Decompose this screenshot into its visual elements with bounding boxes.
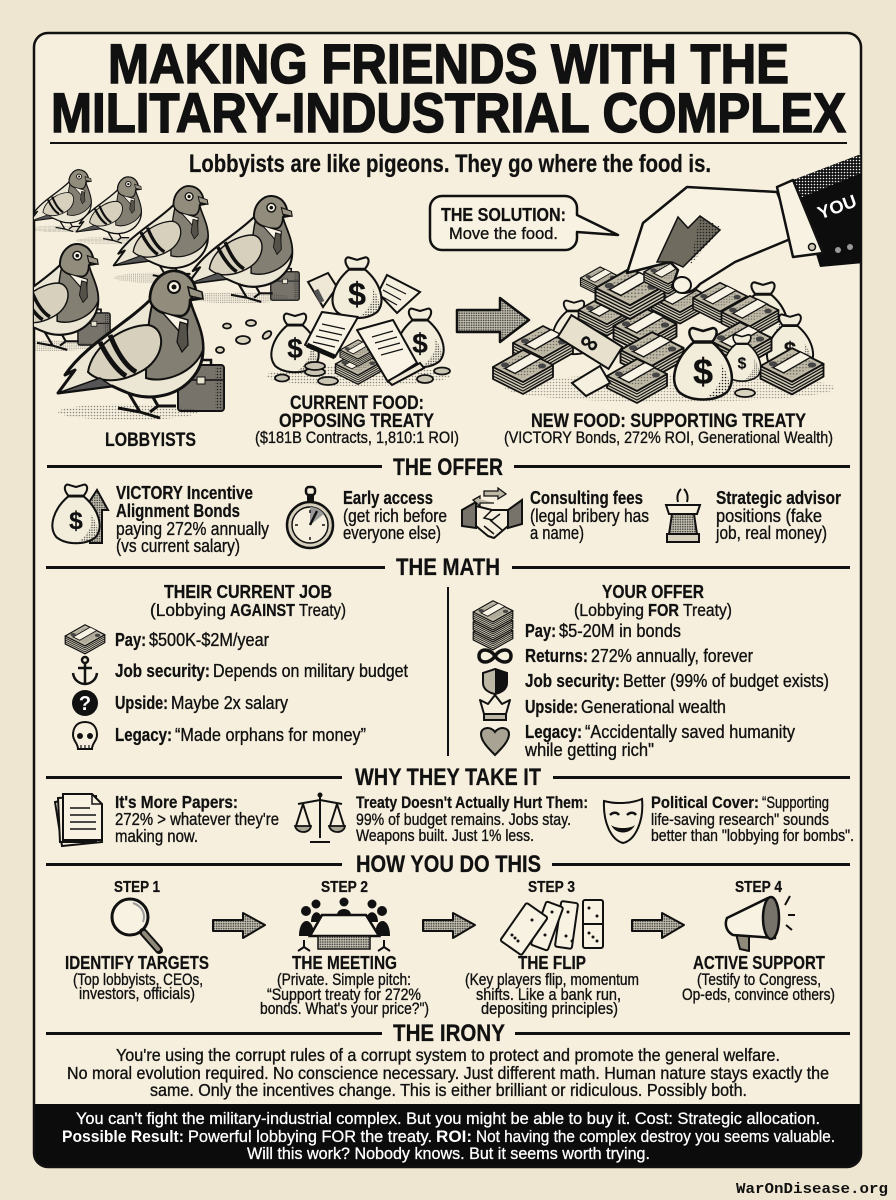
icon: question mark bbox=[72, 690, 98, 716]
footer banner text: Powerful lobbying FOR the treaty. bbox=[188, 1127, 432, 1146]
text: VICTORY bonds: Alignment Bonds bbox=[116, 501, 240, 521]
panel: the offer bbox=[52, 483, 841, 556]
column heading: AGAINST bbox=[230, 600, 295, 620]
icon: money bag with arrow: $ bbox=[69, 508, 83, 535]
panel: steps bbox=[65, 879, 835, 1018]
contract scroll: left bbox=[305, 312, 358, 357]
bag: upper left: $ bbox=[568, 321, 581, 346]
subtitle: Lobbyists are like pigeons. They go where the food is. bbox=[189, 150, 711, 178]
sleeve bbox=[793, 153, 864, 267]
bag: top: $ bbox=[348, 276, 366, 312]
text: strategic advisor: Strategic advisor bbox=[716, 488, 841, 508]
icon: cash bbox=[65, 625, 105, 654]
callout: the solution: Move the food. bbox=[449, 224, 558, 243]
text: early access: everyone else) bbox=[343, 523, 441, 543]
upside: Generational wealth bbox=[581, 697, 726, 717]
pigeon: back left bbox=[30, 170, 91, 232]
text: VICTORY bonds: VICTORY Incentive bbox=[116, 483, 253, 503]
text: political cover bbox=[651, 794, 854, 845]
step 3: shifts. Like a bank run, bbox=[476, 986, 621, 1004]
step 1: investors, officials) bbox=[79, 985, 195, 1003]
text: treaty doesn't hurt: Weapons built. Just 1% less. bbox=[356, 827, 534, 845]
step 4: STEP 4 bbox=[735, 879, 782, 896]
title rule bbox=[50, 142, 847, 144]
arrow: step 1 to 2 bbox=[213, 913, 265, 938]
heading: the offer: THE OFFER bbox=[393, 454, 503, 481]
text: more papers: It's More Papers: bbox=[115, 792, 238, 812]
job security: Depends on military budget bbox=[213, 661, 408, 681]
text: early access: (get rich before bbox=[343, 506, 447, 526]
illustration: new food pile bbox=[493, 258, 835, 403]
text: strategic advisor: positions (fake bbox=[716, 506, 822, 526]
text: the irony: No moral evolution required. No conscience necessary. Just different math. Human nature stays exactly the bbox=[67, 1063, 829, 1083]
pigeon: left bbox=[34, 243, 100, 351]
coins bbox=[275, 362, 450, 385]
step 2 bbox=[260, 879, 429, 1018]
legacy bbox=[524, 722, 795, 760]
pigeon: right bbox=[188, 196, 292, 303]
cuff bbox=[777, 180, 823, 257]
briefcase: front pigeon bbox=[178, 360, 224, 411]
heading: the irony: THE IRONY bbox=[393, 1020, 505, 1047]
title: MAKING FRIENDS WITH THE bbox=[108, 32, 789, 95]
bag: upper right: $ bbox=[756, 307, 770, 334]
text: the irony bbox=[67, 1045, 829, 1100]
step 3: depositing principles) bbox=[481, 1000, 618, 1018]
pay: $5-20M in bonds bbox=[559, 621, 681, 641]
label: new food: NEW FOOD: SUPPORTING TREATY bbox=[531, 410, 806, 432]
legacy: Legacy: bbox=[525, 722, 582, 742]
text: treaty doesn't hurt: 99% of budget remains. Jobs stay. bbox=[356, 811, 571, 829]
bag: upper left bbox=[552, 300, 596, 354]
icon: podium bbox=[666, 489, 700, 542]
briefcase: left pigeon bbox=[78, 309, 110, 345]
icon: megaphone bbox=[726, 896, 795, 951]
footer banner text bbox=[62, 1109, 835, 1163]
job security: Job security: bbox=[525, 671, 620, 691]
heading: why they take it: WHY THEY TAKE IT bbox=[355, 764, 541, 791]
label: new food bbox=[504, 410, 833, 447]
icon: infinity bbox=[479, 650, 511, 662]
text: VICTORY bonds: (vs current salary) bbox=[116, 536, 240, 556]
returns: Returns: bbox=[525, 646, 588, 666]
step 4 bbox=[682, 879, 835, 1004]
icon: crumbs bbox=[216, 320, 273, 353]
heading: the offer bbox=[47, 454, 850, 481]
footer credit: WarOnDisease.org bbox=[736, 1181, 888, 1198]
heading: how you do this bbox=[46, 851, 850, 878]
panel: your offer bbox=[473, 582, 829, 760]
step 3: (Key players flip, momentum bbox=[465, 971, 639, 989]
text: more papers: 272% > whatever they're bbox=[115, 809, 279, 829]
step 2: “Support treaty for 272% bbox=[267, 986, 421, 1004]
briefcase: right pigeon bbox=[271, 269, 299, 300]
job security bbox=[525, 671, 829, 691]
step 1 bbox=[65, 879, 209, 1003]
upside: Maybe 2x salary bbox=[171, 693, 288, 713]
icon: dominoes bbox=[500, 900, 603, 955]
step 1: STEP 1 bbox=[114, 879, 160, 896]
column heading bbox=[150, 582, 346, 620]
bill with infinity: ∞ bbox=[574, 324, 606, 360]
column heading bbox=[574, 582, 732, 620]
icon: skull bbox=[73, 722, 97, 749]
text: consulting fees: (legal bribery has bbox=[530, 506, 649, 526]
text: strategic advisor: job, real money) bbox=[715, 523, 827, 543]
job security: Job security: bbox=[115, 661, 210, 681]
text: consulting fees: a name) bbox=[530, 523, 584, 543]
illustration: current food pile bbox=[266, 257, 450, 386]
label: new food: (VICTORY Bonds, 272% ROI, Generational Wealth) bbox=[504, 428, 833, 447]
pigeon: back middle bbox=[76, 177, 141, 244]
bag: right bbox=[767, 314, 813, 372]
bag: right: $ bbox=[412, 328, 428, 359]
text: political cover: Political Cover: bbox=[651, 794, 759, 812]
pay: $500K-$2M/year bbox=[149, 630, 269, 650]
icon: cash stack bbox=[473, 601, 513, 650]
heading: the math bbox=[46, 554, 850, 581]
bag: small bbox=[723, 335, 761, 382]
heading: the math: THE MATH bbox=[396, 554, 500, 581]
callout: the solution: THE SOLUTION: bbox=[441, 205, 566, 225]
legacy: Legacy: bbox=[115, 725, 172, 745]
panel: why they take it bbox=[55, 792, 854, 846]
legacy: “Accidentally saved humanity bbox=[585, 722, 795, 742]
sleeve label: YOU bbox=[815, 191, 859, 223]
arrow: step 3 to 4 bbox=[632, 913, 684, 938]
icon: crown bbox=[480, 695, 510, 720]
icon: scales bbox=[295, 792, 345, 842]
column heading: (Lobbying bbox=[574, 600, 644, 620]
bill with infinity bbox=[557, 313, 623, 371]
column heading: Treaty) bbox=[683, 600, 732, 620]
returns bbox=[525, 646, 753, 666]
icon: shield bbox=[483, 669, 507, 694]
step 2: (Private. Simple pitch: bbox=[277, 971, 411, 989]
hand bbox=[627, 187, 793, 293]
column heading: THEIR CURRENT JOB bbox=[164, 582, 332, 602]
pay: Pay: bbox=[525, 621, 556, 641]
pigeon: upper middle bbox=[114, 186, 208, 283]
text: strategic advisor bbox=[715, 488, 841, 543]
bag: big front bbox=[674, 328, 732, 400]
icon: handshake bbox=[462, 488, 522, 538]
label: current food: CURRENT FOOD: bbox=[290, 392, 424, 414]
text: treaty doesn't hurt: Treaty Doesn't Actually Hurt Them: bbox=[356, 794, 588, 812]
footer banner text: ROI: bbox=[436, 1127, 472, 1146]
icon: heart bbox=[481, 728, 509, 755]
column heading: FOR bbox=[648, 600, 679, 620]
step 4: Op-eds, convince others) bbox=[682, 986, 835, 1004]
bag: small: $ bbox=[738, 356, 747, 373]
step 3: THE FLIP bbox=[518, 952, 586, 973]
step 3 bbox=[465, 879, 639, 1018]
heading: how you do this: HOW YOU DO THIS bbox=[356, 851, 541, 878]
arrow: step 2 to 3 bbox=[423, 913, 475, 938]
text: political cover: life-saving research" sounds bbox=[651, 811, 829, 829]
bag: left bbox=[271, 314, 319, 373]
label: current food bbox=[255, 392, 459, 447]
footer banner text: Not having the complex destroy you seems valuable. bbox=[476, 1127, 835, 1146]
column heading: (Lobbying bbox=[150, 600, 226, 620]
text: political cover: “Supporting bbox=[762, 794, 829, 812]
step 4: (Testify to Congress, bbox=[697, 971, 821, 989]
legacy: “Made orphans for money” bbox=[175, 725, 366, 745]
text: treaty doesn't hurt bbox=[356, 794, 588, 845]
icon: money bag with arrow bbox=[52, 485, 108, 544]
upside bbox=[115, 693, 288, 713]
text: VICTORY bonds: paying 272% annually bbox=[116, 519, 269, 539]
job security bbox=[115, 661, 408, 681]
icon: anchor bbox=[73, 657, 97, 684]
label: current food: ($181B Contracts, 1,810:1 ROI) bbox=[255, 428, 459, 447]
callout: the solution bbox=[430, 196, 618, 250]
column heading: Treaty) bbox=[299, 600, 346, 620]
heading: the irony bbox=[46, 1020, 850, 1047]
icon: papers bbox=[55, 794, 102, 846]
label: lobbyists: LOBBYISTS bbox=[105, 429, 196, 451]
text: political cover: better than "lobbying for bombs". bbox=[651, 827, 854, 845]
text: consulting fees: Consulting fees bbox=[530, 488, 643, 508]
bag: right: $ bbox=[784, 338, 797, 363]
step 4: ACTIVE SUPPORT bbox=[693, 952, 826, 973]
footer banner text: You can't fight the military-industrial complex. But you might be able to buy it. Cost: Strategic allocation. bbox=[76, 1109, 820, 1128]
panel: their current job bbox=[65, 582, 408, 749]
icon: question mark: ? bbox=[79, 693, 91, 715]
bag: top bbox=[333, 257, 381, 318]
footer banner text: Will this work? Nobody knows. But it seems worth trying. bbox=[247, 1144, 650, 1163]
text: early access bbox=[343, 488, 447, 543]
bag: left: $ bbox=[287, 333, 303, 364]
bag: upper right bbox=[739, 282, 787, 344]
icon: stopwatch bbox=[287, 487, 333, 548]
arrow: move food bbox=[457, 298, 529, 342]
column heading: YOUR OFFER bbox=[602, 582, 704, 602]
bag: right bbox=[396, 309, 444, 368]
returns: 272% annually, forever bbox=[591, 646, 753, 666]
upside bbox=[525, 697, 726, 717]
job security: Better (99% of budget exists) bbox=[623, 671, 829, 691]
contract scroll: right bbox=[357, 320, 424, 385]
step 1: (Top lobbyists, CEOs, bbox=[73, 971, 203, 989]
icon: meeting table bbox=[298, 898, 390, 951]
upside: Upside: bbox=[525, 697, 578, 717]
illustration: flock of lobbyist pigeons bbox=[34, 169, 300, 420]
text: the irony: You're using the corrupt rules of a corrupt system to protect and promote the general welfare. bbox=[116, 1045, 780, 1065]
text: VICTORY bonds bbox=[116, 483, 269, 556]
label: current food: OPPOSING TREATY bbox=[279, 410, 434, 432]
text: consulting fees bbox=[530, 488, 649, 543]
upside: Upside: bbox=[115, 693, 168, 713]
title bbox=[51, 32, 846, 144]
divider bbox=[447, 587, 449, 756]
step 2: THE MEETING bbox=[292, 952, 397, 973]
step 3: STEP 3 bbox=[528, 879, 575, 896]
pay: Pay: bbox=[115, 630, 146, 650]
text: more papers bbox=[115, 792, 279, 846]
icon: magnifying glass bbox=[112, 899, 159, 950]
heading: why they take it bbox=[46, 764, 850, 791]
step 2: STEP 2 bbox=[321, 879, 368, 896]
text: early access: Early access bbox=[343, 488, 433, 508]
bag: big front: $ bbox=[693, 351, 713, 392]
illustration: hand of YOU bbox=[627, 153, 864, 293]
step 1: IDENTIFY TARGETS bbox=[65, 952, 209, 973]
pigeon: front bbox=[58, 271, 203, 420]
icon: theater mask bbox=[604, 799, 642, 843]
step 2: bonds. What's your price?") bbox=[260, 1000, 429, 1018]
text: more papers: making now. bbox=[115, 826, 198, 846]
footer banner text: Possible Result: bbox=[62, 1127, 184, 1146]
coins bbox=[735, 389, 755, 397]
text: the irony: same. Only the incentives change. This is either brilliant or ridiculous. Possibly both. bbox=[150, 1080, 747, 1100]
legacy: while getting rich" bbox=[524, 740, 654, 760]
